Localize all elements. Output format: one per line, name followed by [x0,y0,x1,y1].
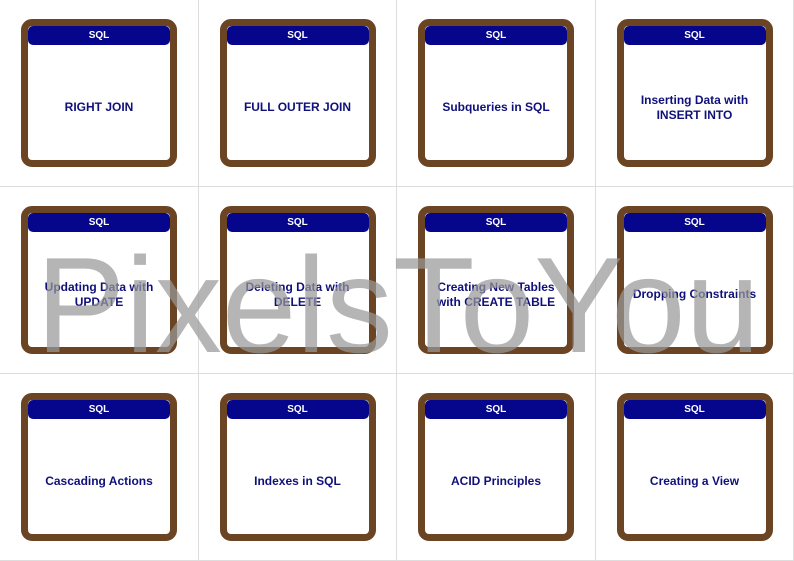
card: RIGHT JOIN: SQL [89,30,109,41]
card: Updating Data [0,187,198,374]
card: Indexes: Indexes in SQL [254,474,341,488]
card: Creating New Tables: with CREATE TABLE [437,294,555,308]
watermark: PixelsToYou [36,229,760,381]
card: Deleting Data [198,187,397,374]
card: Deleting Data: SQL [287,217,308,228]
card: RIGHT JOIN [0,0,198,187]
card: Creating New Tables: SQL [486,217,506,228]
card: Creating a View: Creating a View [650,474,739,488]
card: Subqueries: Subqueries in SQL [442,100,550,114]
card: Dropping Constraints: SQL [684,217,705,228]
card: Cascading Actions: SQL [89,404,109,415]
card: FULL OUTER JOIN: SQL [287,30,308,41]
card: FULL OUTER JOIN [198,0,397,187]
card: Subqueries [397,0,596,187]
card: Creating New Tables [397,187,596,374]
card: Dropping Constraints: Dropping Constraints [633,287,756,301]
card: Inserting Data [596,0,794,187]
card: ACID: ACID Principles [451,474,541,488]
card: Subqueries: SQL [486,30,506,41]
card: Cascading Actions [0,374,198,561]
card: FULL OUTER JOIN: FULL OUTER JOIN [244,100,351,114]
card: Indexes: SQL [287,404,308,415]
card: ACID: SQL [486,404,506,415]
card: Deleting Data: DELETE [274,294,321,308]
card: Dropping Constraints [596,187,794,374]
card: Inserting Data: SQL [684,30,705,41]
card: Updating Data: UPDATE [75,294,123,308]
card: Creating a View [596,374,794,561]
card: Inserting Data: Inserting Data with [641,92,748,106]
card: Updating Data: SQL [89,217,109,228]
card: Cascading Actions: Cascading Actions [45,474,153,488]
card: Updating Data: Updating Data with [45,280,153,294]
card: RIGHT JOIN: RIGHT JOIN [65,100,133,114]
card: Deleting Data: Deleting Data with [245,280,350,294]
card: Inserting Data: INSERT INTO [657,108,732,122]
card: Creating New Tables: Creating New Tables [437,280,555,294]
card: Creating a View: SQL [684,404,705,415]
card: Indexes [198,374,397,561]
card: ACID [397,374,596,561]
